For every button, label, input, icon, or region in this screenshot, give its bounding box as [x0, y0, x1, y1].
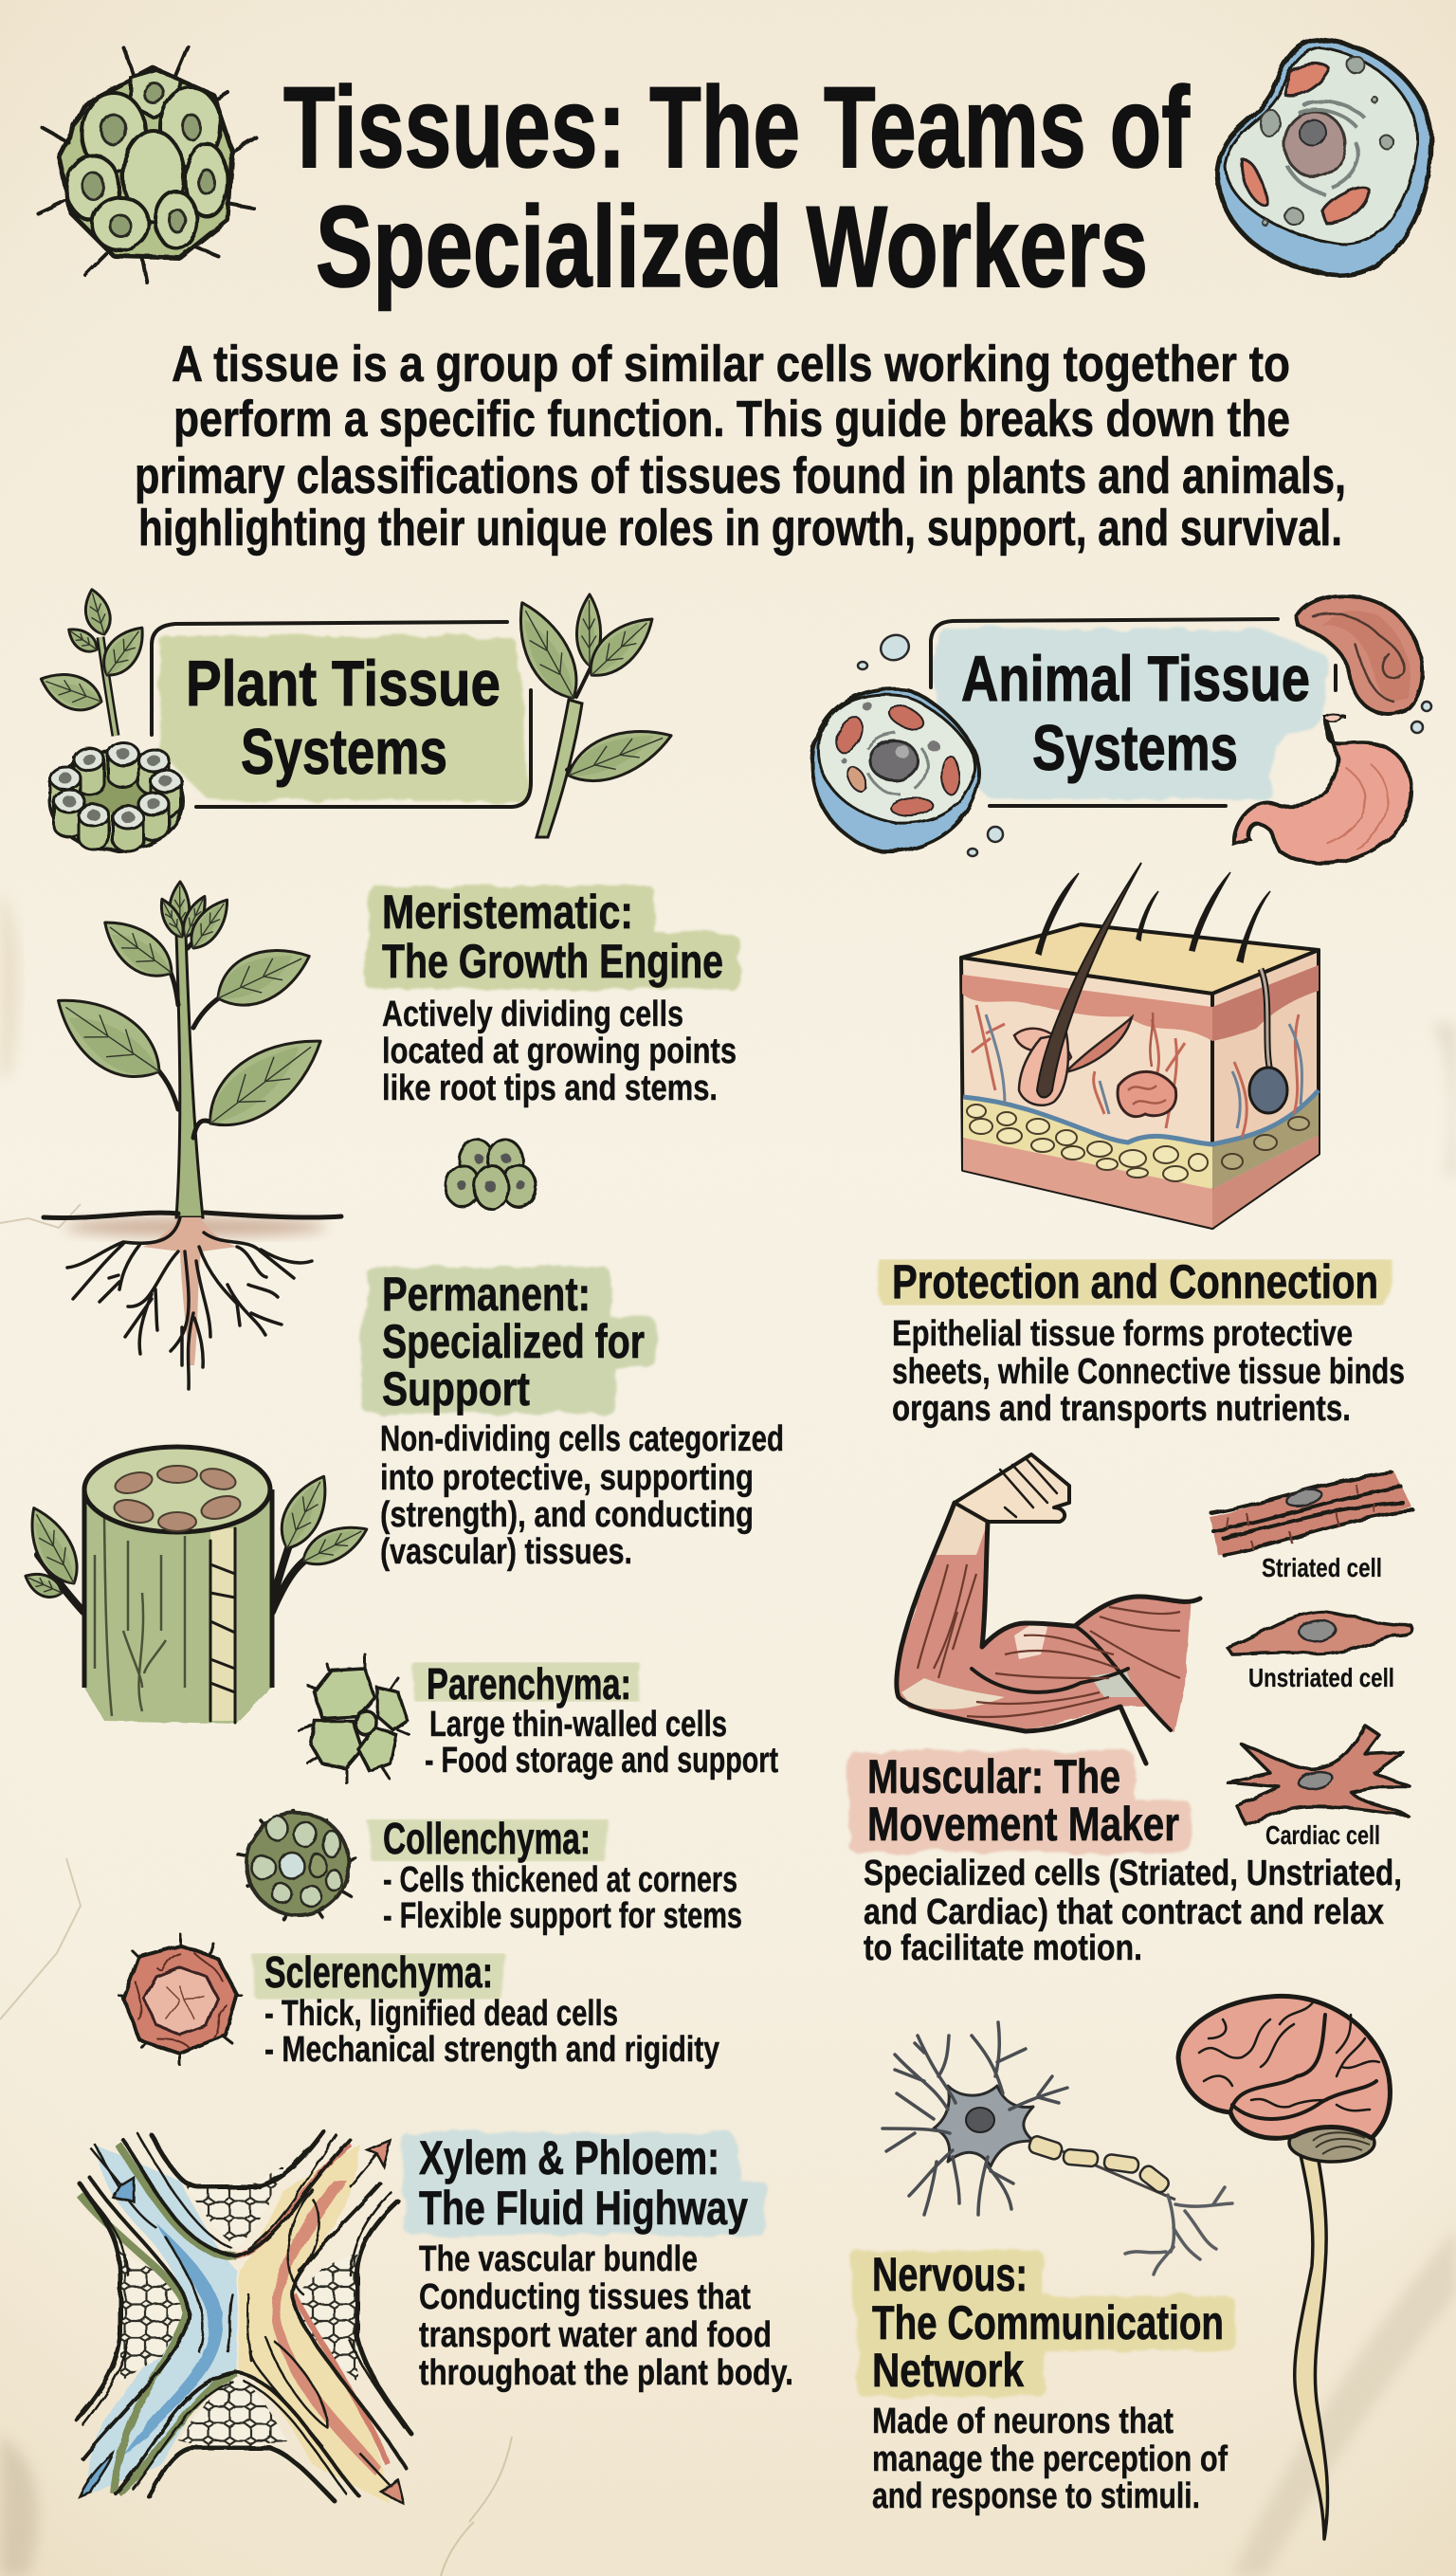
panel: xylem and phloem text: The vascular bundle — [419, 2239, 698, 2279]
panel: protection and connection text: organs and transports nutrients. — [892, 1389, 1351, 1429]
intro text: A tissue is a group of similar cells working together to — [172, 336, 1290, 393]
ink contours — [77, 2131, 411, 2500]
panel: xylem and phloem text: Conducting tissues that — [419, 2277, 751, 2317]
panel: muscular text: to facilitate motion. — [864, 1928, 1142, 1968]
icon: unstriated cell — [1228, 1612, 1411, 1654]
icon: animal cell section — [812, 689, 979, 851]
panel: collenchyma: - Cells thickened at corners — [383, 1860, 737, 1900]
title — [283, 63, 1190, 311]
panel: protection and connection text: Epithelial tissue forms protective — [892, 1314, 1353, 1354]
panel: plant tissue heading: Plant Tissue — [186, 648, 500, 720]
soil patch — [64, 1217, 326, 1236]
icon: flexed arm muscle — [897, 1454, 1200, 1763]
label: striated cell: Striated cell — [1262, 1553, 1382, 1582]
panel: permanent text: (vascular) tissues. — [380, 1532, 632, 1572]
water wash — [88, 2145, 237, 2494]
roots — [67, 1217, 312, 1389]
panel: sclerenchyma: - Thick, lignified dead cells — [264, 1994, 618, 2034]
icon: pancreas organ — [1297, 595, 1423, 714]
icon: brain and spinal cord — [1178, 1996, 1390, 2539]
panel: nervous text: Made of neurons that — [872, 2402, 1174, 2441]
panel: meristematic text: The Growth Engine — [382, 935, 723, 988]
panel: xylem and phloem text: The Fluid Highway — [419, 2182, 748, 2235]
panel: permanent text: Specialized for — [382, 1315, 645, 1368]
green sheaths — [80, 2145, 237, 2494]
icon: sclerenchyma cell — [119, 1934, 242, 2065]
panel: nervous text: Nervous: — [872, 2248, 1028, 2301]
panel: animal tissue heading: Animal Tissue — [961, 643, 1310, 715]
icon: striated cell — [1210, 1471, 1413, 1555]
icon: meristem cell cluster — [446, 1140, 536, 1209]
panel: nervous text: The Communication — [872, 2296, 1224, 2349]
icon: stem cross-section ring — [50, 742, 183, 851]
icon: animal cell — [1217, 40, 1431, 275]
panel: parenchyma — [299, 1654, 778, 1782]
panel: parenchyma: Large thin-walled cells — [429, 1705, 727, 1745]
panel: permanent text: into protective, supporting — [380, 1458, 754, 1498]
follicle — [1019, 1033, 1068, 1105]
panel: meristematic text: Actively dividing cells — [382, 995, 683, 1034]
panel: permanent text: (strength), and conducting — [380, 1495, 754, 1535]
icon: parenchyma cells — [299, 1654, 410, 1782]
panel: permanent text: Non-dividing cells categorized — [380, 1419, 784, 1459]
panel: parenchyma: - Food storage and support — [425, 1741, 778, 1781]
hairs — [1036, 872, 1270, 962]
panel: collenchyma — [237, 1811, 742, 1936]
label: cardiac cell: Cardiac cell — [1265, 1820, 1380, 1850]
icon: plant cell cluster — [38, 46, 256, 283]
icon: left sprig — [35, 587, 153, 736]
panel: sclerenchyma — [119, 1934, 719, 2070]
icon: bubbles — [858, 631, 1431, 856]
title: Specialized Workers — [316, 182, 1148, 311]
panel: meristematic text: like root tips and stems. — [382, 1069, 718, 1108]
panel: permanent text — [371, 1268, 784, 1572]
food wash — [239, 2145, 389, 2503]
icon: whole plant with roots — [42, 882, 341, 1389]
panel: sclerenchyma: Sclerenchyma: — [264, 1947, 493, 1997]
icon: vascular bundle diagram — [77, 2131, 411, 2504]
panel: animal tissue heading: Systems — [1032, 712, 1238, 784]
panel: permanent text: Permanent: — [382, 1268, 591, 1321]
panel: muscular text: Muscular: The — [867, 1750, 1120, 1803]
panel: muscular text — [855, 1750, 1402, 1968]
panel: meristematic text — [373, 886, 737, 1108]
icon: skin cross-section — [961, 863, 1319, 1228]
panel: meristematic text: Meristematic: — [382, 886, 633, 939]
icon: neuron — [883, 2022, 1232, 2275]
icon: cardiac cell — [1228, 1726, 1410, 1825]
sweat gland — [1118, 1071, 1176, 1117]
panel: xylem and phloem text: transport water and food — [419, 2315, 772, 2355]
panel: collenchyma: - Flexible support for stems — [383, 1896, 742, 1936]
intro text — [135, 336, 1346, 557]
panel: muscular text: Movement Maker — [867, 1798, 1179, 1851]
arrector muscle — [1065, 1017, 1132, 1072]
panel: animal tissue heading — [931, 619, 1336, 806]
panel: nervous text: manage the perception of — [872, 2439, 1228, 2479]
panel: permanent text: Support — [382, 1362, 530, 1416]
sebaceous gland — [1014, 1029, 1071, 1061]
panel: protection and connection text — [883, 1255, 1405, 1429]
panel: meristematic text: located at growing points — [382, 1032, 737, 1071]
cell masses — [180, 2162, 284, 2247]
panel: sclerenchyma: - Mechanical strength and rigidity — [264, 2030, 719, 2070]
panel: xylem and phloem text — [410, 2131, 793, 2393]
panel: plant tissue heading: Systems — [241, 716, 447, 788]
icon: right plant sprig — [503, 594, 678, 837]
icon: stomach organ — [1234, 714, 1411, 863]
panel: xylem and phloem text: Xylem & Phloem: — [419, 2131, 719, 2184]
panel: collenchyma: Collenchyma: — [383, 1814, 591, 1863]
icon: stem trunk section — [18, 1447, 373, 1724]
panel: xylem and phloem text: throughoat the plant body. — [419, 2353, 793, 2393]
panel: parenchyma: Parenchyma: — [427, 1659, 631, 1708]
panel: nervous text — [859, 2248, 1228, 2516]
right dark bulb — [1261, 969, 1270, 1071]
panel: plant tissue heading — [152, 622, 531, 807]
panel: nervous text: and response to stimuli. — [872, 2476, 1200, 2516]
arrows — [90, 2147, 134, 2201]
icon: collenchyma cells — [237, 1811, 355, 1920]
panel: nervous text: Network — [872, 2344, 1024, 2397]
label: unstriated cell: Unstriated cell — [1248, 1663, 1394, 1692]
